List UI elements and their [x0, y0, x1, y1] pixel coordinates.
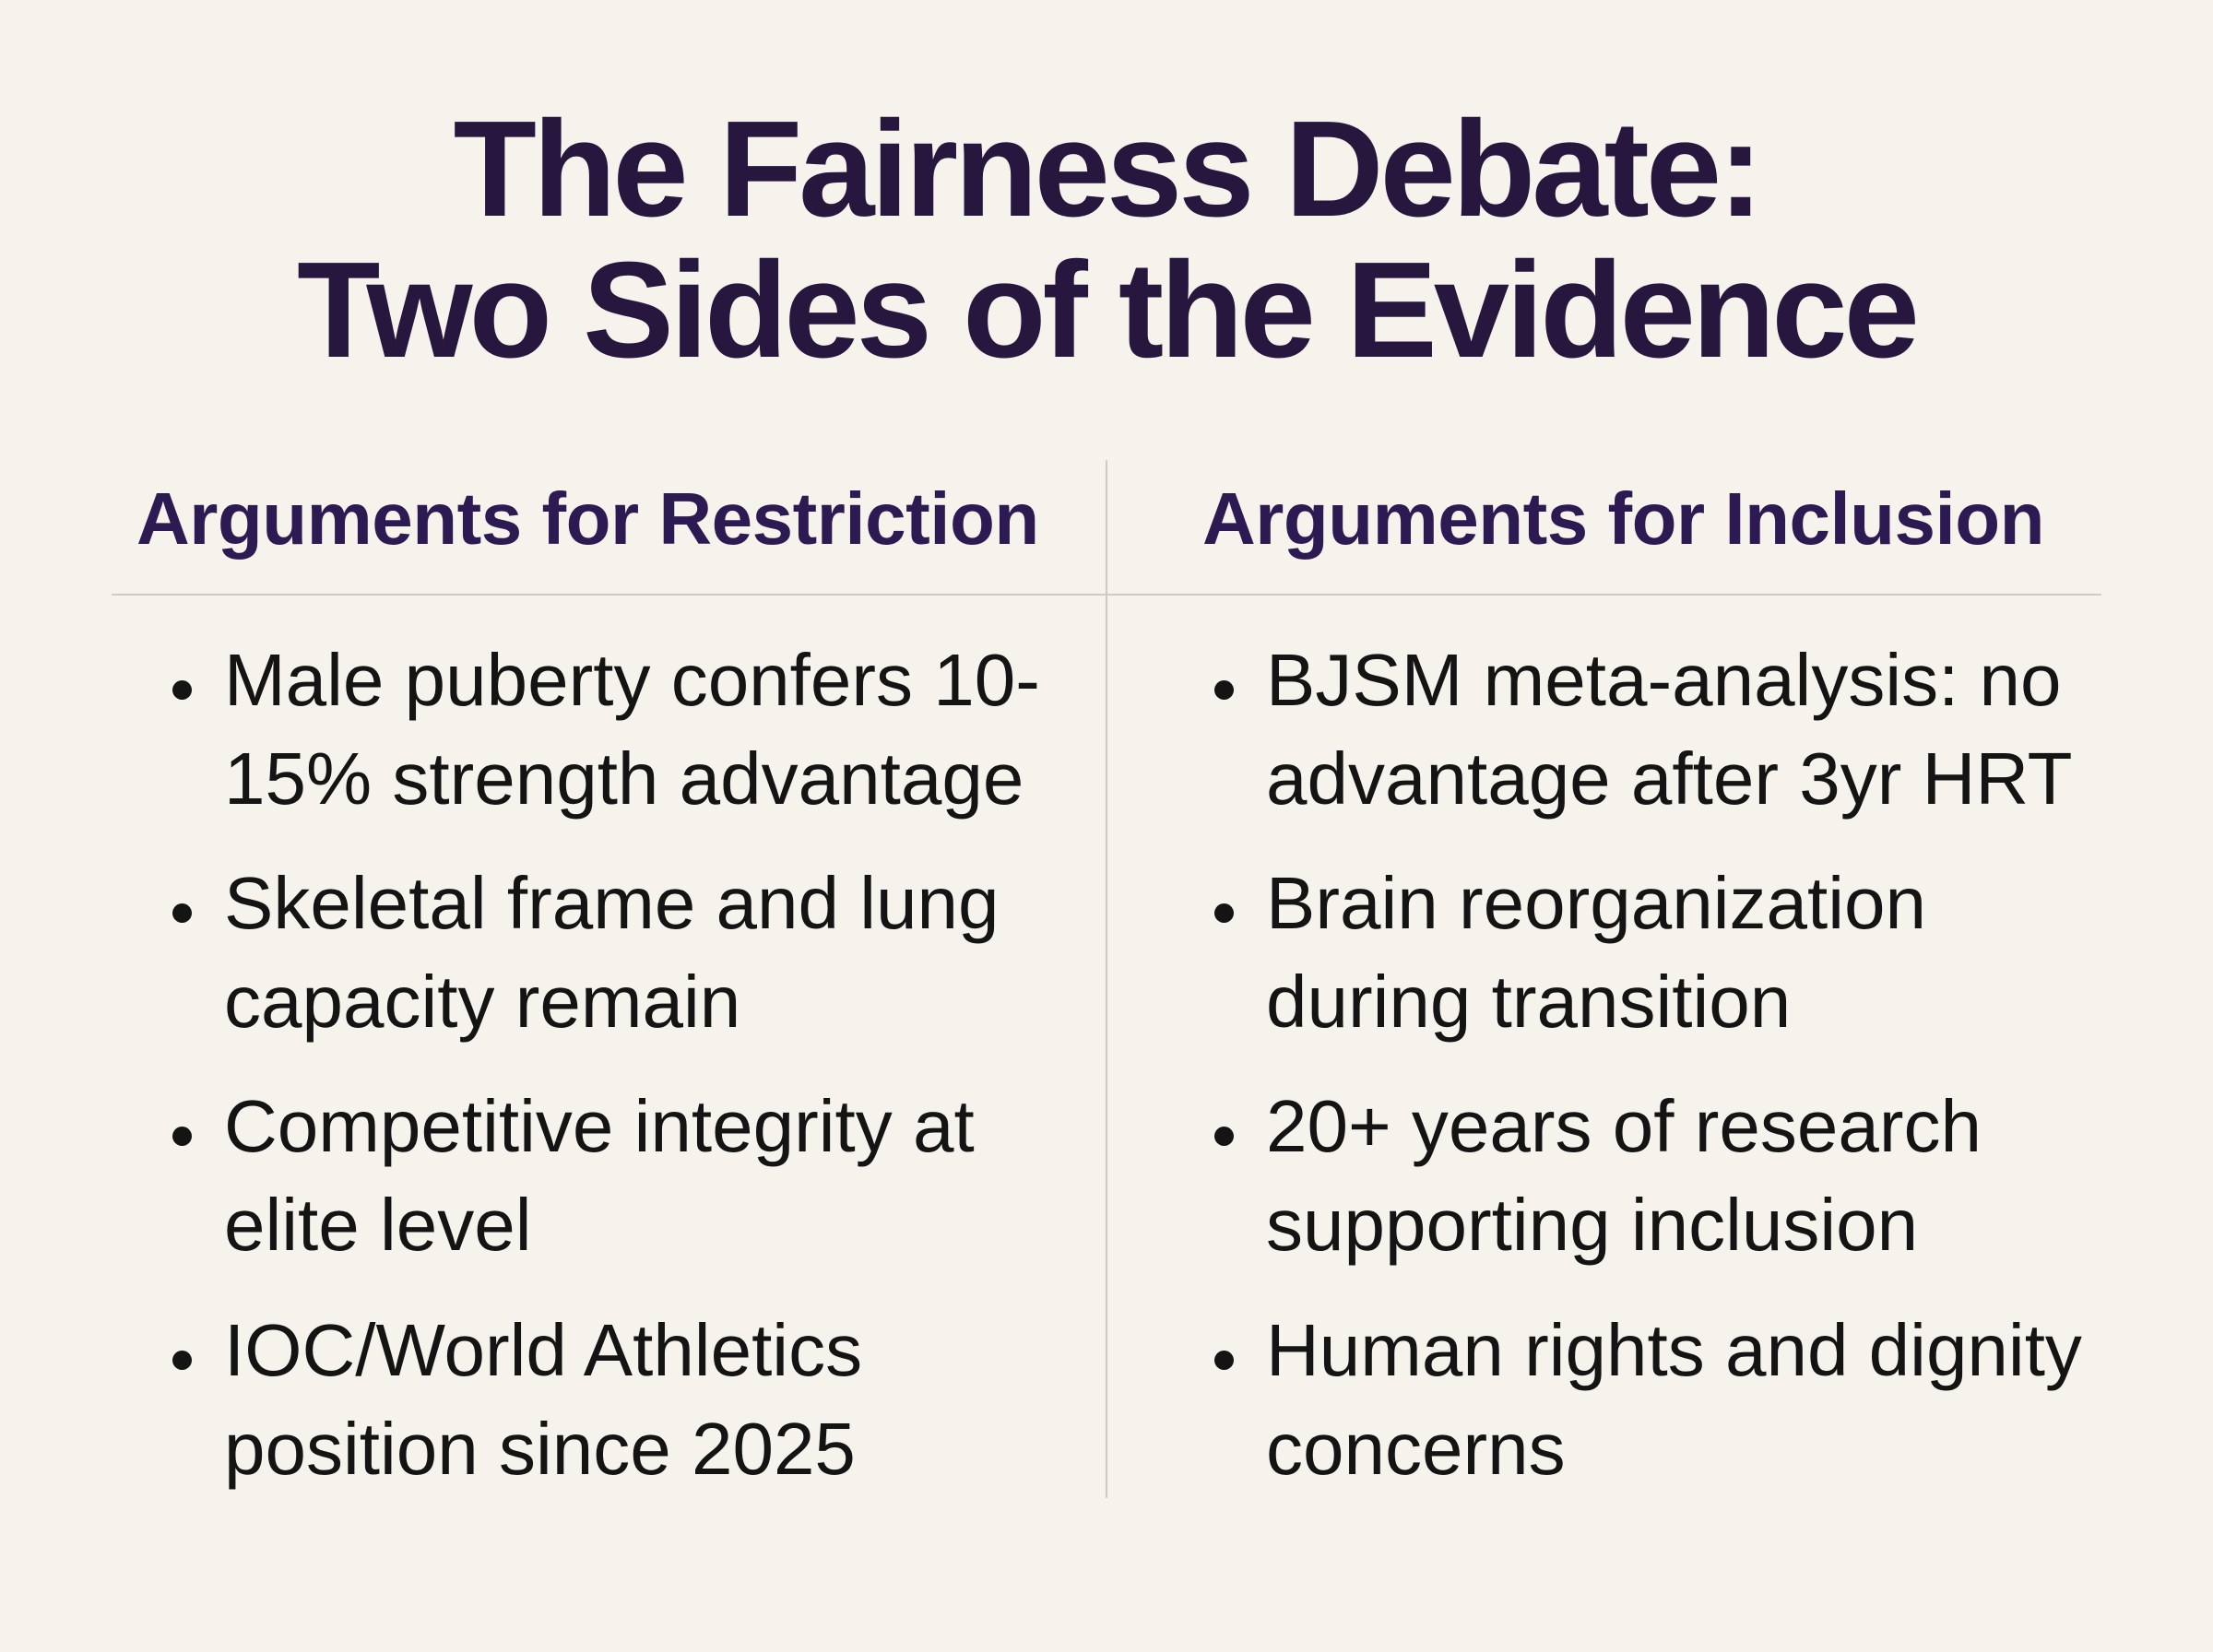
bullet: BJSM	[1266, 631, 2073, 828]
bullet: brain: during transition	[1266, 961, 1791, 1043]
title: The Fairness Debate:	[454, 93, 1759, 245]
bullet: integrity	[224, 1077, 975, 1274]
bullet: human rights: concerns	[1266, 1408, 1566, 1490]
bullet: skeletal	[224, 854, 1000, 1051]
bullet: research: supporting inclusion	[1266, 1184, 1918, 1266]
bullet: puberty: 15% strength advantage	[224, 738, 1024, 820]
title: Two Sides of the Evidence	[297, 234, 1916, 386]
bullet: integrity: Competitive integrity at	[224, 1085, 975, 1167]
bullet: IOC: position since 2025	[224, 1408, 856, 1490]
bullet: BJSM: advantage after 3yr HRT	[1266, 738, 2073, 820]
panel: restriction bullets	[172, 639, 1040, 1490]
bullet: brain: Brain reorganization	[1266, 862, 1926, 944]
title	[297, 93, 1916, 386]
bullet: brain	[1266, 854, 1926, 1051]
bullet: skeletal: Skeletal frame and lung	[224, 862, 1000, 944]
bullet: puberty: Male puberty confers 10-	[224, 639, 1040, 721]
bullet: research	[1266, 1077, 1982, 1274]
bullet: puberty	[224, 631, 1040, 828]
heading: restriction: Arguments for Restriction	[136, 478, 1039, 560]
bullet: BJSM: BJSM meta-analysis: no	[1266, 639, 2062, 721]
bullet: human rights: Human rights and dignity	[1266, 1309, 2082, 1391]
bullet: integrity: elite level	[224, 1184, 532, 1266]
bullet: human rights	[1266, 1301, 2082, 1498]
bullet: research: 20+ years of research	[1266, 1085, 1982, 1167]
bullet: IOC: IOC/World Athletics	[224, 1309, 862, 1391]
panel: inclusion bullets	[1214, 639, 2082, 1490]
heading: inclusion: Arguments for Inclusion	[1202, 478, 2044, 560]
bullet: skeletal: capacity remain	[224, 961, 740, 1043]
bullet: IOC	[224, 1301, 862, 1498]
